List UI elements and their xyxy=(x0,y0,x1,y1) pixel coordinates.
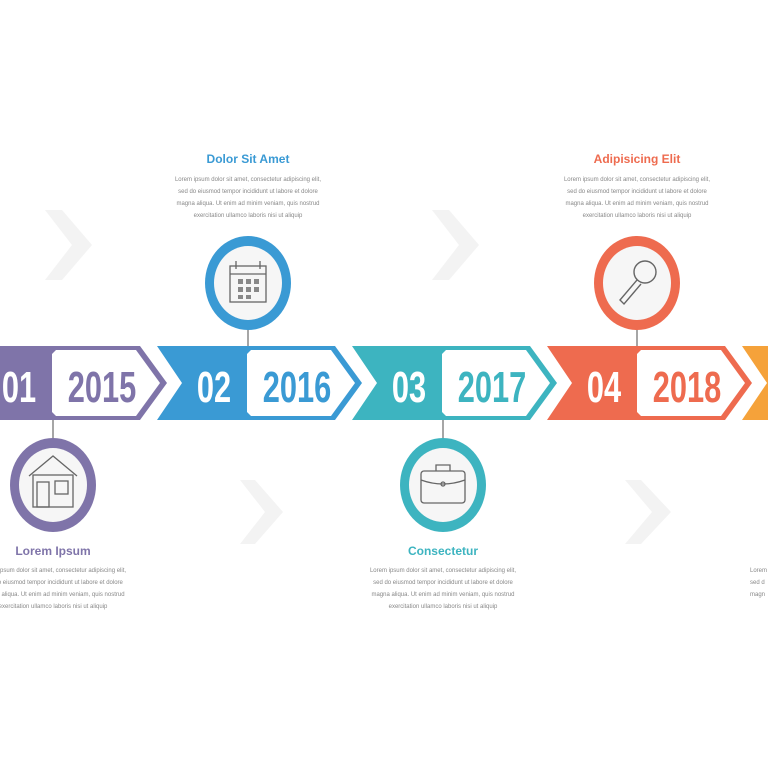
text: Dolor Sit Amet: magna aliqua. Ut enim ad minim veniam, quis nostrud xyxy=(176,201,320,207)
segment 1: 01 xyxy=(2,364,36,412)
segment 4 xyxy=(547,346,752,420)
text: Consectetur: magna aliqua. Ut enim ad minim veniam, quis nostrud xyxy=(371,592,515,598)
text: Adipisicing Elit: magna aliqua. Ut enim ad minim veniam, quis nostrud xyxy=(565,201,709,207)
segment 4: 2018 xyxy=(653,364,721,412)
icon: briefcase xyxy=(421,465,465,503)
text: Dolor Sit Amet xyxy=(175,152,321,219)
text: Consectetur: sed do eiusmod tempor incididunt ut labore et dolore xyxy=(373,580,514,586)
icon: magnifier xyxy=(620,261,656,304)
text: Adipisicing Elit: exercitation ullamco laboris nisi ut aliquip xyxy=(583,213,692,219)
text: Lorem Ipsum xyxy=(0,544,126,610)
segment 2 xyxy=(157,346,362,420)
text: Dolor Sit Amet: Lorem ipsum dolor sit amet, consectetur adipiscing elit, xyxy=(175,177,321,183)
text: Adipisicing Elit: sed do eiusmod tempor incididunt ut labore et dolore xyxy=(567,189,708,195)
text: Dolor Sit Amet: sed do eiusmod tempor incididunt ut labore et dolore xyxy=(178,189,319,195)
text: Consectetur: Consectetur xyxy=(408,544,478,558)
segment 2: 02 xyxy=(197,364,231,412)
text: Adipisicing Elit: Adipisicing Elit xyxy=(594,152,680,166)
segment 3: 03 xyxy=(392,364,426,412)
node 3: briefcase xyxy=(400,420,486,532)
text: Consectetur: exercitation ullamco laboris nisi ut aliquip xyxy=(389,604,498,610)
text: Adipisicing Elit: Lorem ipsum dolor sit amet, consectetur adipiscing elit, xyxy=(564,177,710,183)
segment 4: 04 xyxy=(587,364,621,412)
text: partial node 5: Lorem xyxy=(750,568,767,574)
node 1: house xyxy=(10,420,96,532)
segment 2: 2016 xyxy=(263,364,331,412)
node 4: magnifier xyxy=(594,236,680,346)
segment 1: 2015 xyxy=(68,364,136,412)
icon: calendar xyxy=(230,261,266,302)
segment 1 xyxy=(0,346,167,420)
text: partial node 5 xyxy=(750,568,767,598)
text: Lorem Ipsum: Lorem Ipsum xyxy=(15,544,91,558)
segment 3 xyxy=(352,346,557,420)
text: Consectetur: Lorem ipsum dolor sit amet, consectetur adipiscing elit, xyxy=(370,568,516,574)
text: Consectetur xyxy=(370,544,516,610)
segment 3: 2017 xyxy=(458,364,526,412)
text: Adipisicing Elit xyxy=(564,152,710,219)
text: partial node 5: magn xyxy=(750,592,765,598)
text: Dolor Sit Amet: Dolor Sit Amet xyxy=(207,152,289,166)
icon: house xyxy=(29,456,77,507)
text: Lorem Ipsum: exercitation ullamco laboris nisi ut aliquip xyxy=(0,604,108,610)
segment 5 partial xyxy=(742,346,768,420)
node 2: calendar xyxy=(205,236,291,346)
text: Dolor Sit Amet: exercitation ullamco laboris nisi ut aliquip xyxy=(194,213,303,219)
text: partial node 5: sed d xyxy=(750,580,765,586)
